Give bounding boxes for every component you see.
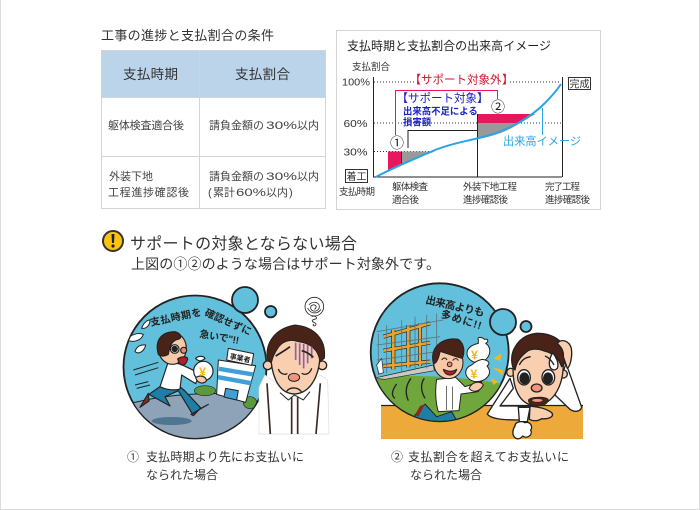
grey area 2: [478, 123, 520, 139]
construction scene: [376, 313, 504, 421]
caption 2: [391, 449, 569, 482]
row 2 text: 外装下地: [109, 170, 153, 183]
caption 1: [127, 450, 304, 482]
running man: [140, 332, 213, 416]
row 2 text: [108, 169, 319, 199]
row 1 text: 躯体検査適合後: [108, 118, 184, 132]
illustration 1: paying too early: [118, 287, 329, 445]
x axis labels: 完了工程: [545, 182, 580, 193]
label: supported: 損害額: [403, 116, 432, 128]
bubble large: [232, 287, 258, 313]
complete box: 完成: [570, 78, 590, 90]
panel: progress chart: [336, 30, 600, 210]
y axis labels: [342, 78, 370, 158]
grey area 1: [401, 152, 435, 164]
curve label: 出来高イメージ: [503, 135, 581, 148]
heading: not covered: サポートの対象とならない場合: [130, 235, 357, 253]
running scene: 事業者: [229, 351, 251, 365]
label: out of support: 【: [410, 74, 422, 86]
small worker: [377, 358, 383, 374]
row 2 text: 請負金額の: [209, 169, 264, 183]
y axis labels: 30%: [344, 148, 368, 158]
label: supported: 】: [477, 92, 488, 105]
right sleeve: [555, 363, 582, 411]
x axis labels: 進捗確認後: [463, 194, 508, 206]
label: supported: 【: [396, 92, 408, 105]
left sleeve and forearm: [487, 378, 537, 420]
label: supported: サポート対象: [408, 92, 477, 105]
tired man: [259, 325, 329, 434]
pink area 2: [478, 114, 535, 123]
caption 2: なられた場合: [410, 468, 482, 482]
row 2 text: 工程進捗確認後: [108, 185, 189, 199]
scribble thought: [305, 297, 324, 326]
caption 2: ②: [391, 450, 403, 464]
table header: payment timing: 支払時期: [123, 67, 178, 82]
panel: conditions table: [102, 50, 326, 208]
running scene: [129, 320, 257, 438]
label: supported: 出来高不足による: [403, 106, 478, 116]
y axis labels: 60%: [344, 119, 368, 130]
handwritten speech: 急いで"!!: [198, 327, 240, 347]
caption 1: ①: [127, 450, 139, 464]
icon: warning: [103, 231, 123, 251]
caption 1: なられた場合: [146, 468, 218, 482]
chart title: 支払時期と支払割合の出来高イメージ: [347, 39, 551, 53]
label: out of support: サポート対象外: [421, 74, 502, 86]
heading: table title: 工事の進捗と支払割合の条件: [101, 28, 274, 43]
caption 1: 支払時期より先にお支払いに: [146, 450, 304, 464]
label: supported: [396, 92, 488, 128]
x axis labels: [339, 181, 590, 206]
speed lines: [133, 362, 158, 388]
x axis labels: 躯体検査: [392, 181, 428, 193]
x axis labels: 支払時期: [339, 186, 375, 198]
bubble small: [520, 321, 532, 332]
row 1 text: 以内: [297, 118, 319, 132]
y axis labels: 100%: [342, 78, 370, 88]
handwritten speech: 出来高よりも: [424, 293, 486, 319]
desk: [381, 406, 583, 439]
money bags: [467, 337, 490, 363]
bubble small: [265, 306, 276, 317]
building: [217, 348, 256, 402]
illustration 2: paying too much: [365, 283, 583, 439]
smiling man with money bags: ¥: [470, 367, 477, 381]
thought circle: [124, 296, 266, 438]
handwritten speech: 多めに!!: [439, 307, 483, 332]
handwritten speech: [149, 305, 254, 347]
thought circle: [371, 283, 509, 421]
x axis labels: 外装下地工程: [463, 181, 517, 193]
x axis labels: 適合後: [392, 194, 419, 206]
handwritten speech: 確認せずに: [203, 306, 254, 338]
row 1 text: [108, 118, 319, 132]
row 2 text: 以内: [266, 185, 288, 199]
row 2 text: 60%: [236, 187, 266, 199]
table header: payment ratio: 支払割合: [235, 67, 290, 82]
bubble large: [490, 309, 516, 335]
magenta bracket: [396, 90, 498, 135]
row 1 text: 30%: [266, 120, 297, 132]
row 2 text: 以内: [297, 169, 319, 183]
cuff: [513, 422, 532, 439]
row 2 text: 30%: [266, 171, 297, 183]
handwritten speech: 支払時期を: [149, 305, 202, 329]
row 1 text: 請負金額の: [209, 118, 264, 132]
marker 2: ②: [491, 99, 505, 115]
start box: 着工: [346, 170, 366, 183]
row 2 text: ): [289, 187, 293, 199]
caption 2: 支払割合を超えてお支払いに: [408, 449, 569, 464]
curve label: [503, 108, 581, 148]
sweat: [549, 353, 558, 370]
text: explanation: 上図の①②のような場合はサポート対象外です。: [131, 256, 440, 272]
marker 1: ①: [390, 135, 404, 151]
row 2 text: (: [208, 187, 212, 199]
hand: [529, 406, 553, 421]
y axis title: 支払割合: [352, 61, 391, 73]
row 2 text: 累計: [213, 185, 235, 199]
pink area 1: [388, 152, 401, 171]
label: out of support: 】: [502, 74, 514, 86]
smiling man with money bags: [433, 337, 490, 412]
running man: ¥: [199, 365, 206, 379]
handwritten speech: [424, 293, 486, 332]
x axis labels: 進捗確認後: [545, 194, 590, 206]
worried man: [487, 333, 582, 439]
smiling man with money bags: ¥: [471, 348, 478, 362]
progress curve: [376, 84, 561, 177]
building frame: [383, 323, 430, 369]
hand on head: [557, 341, 572, 368]
